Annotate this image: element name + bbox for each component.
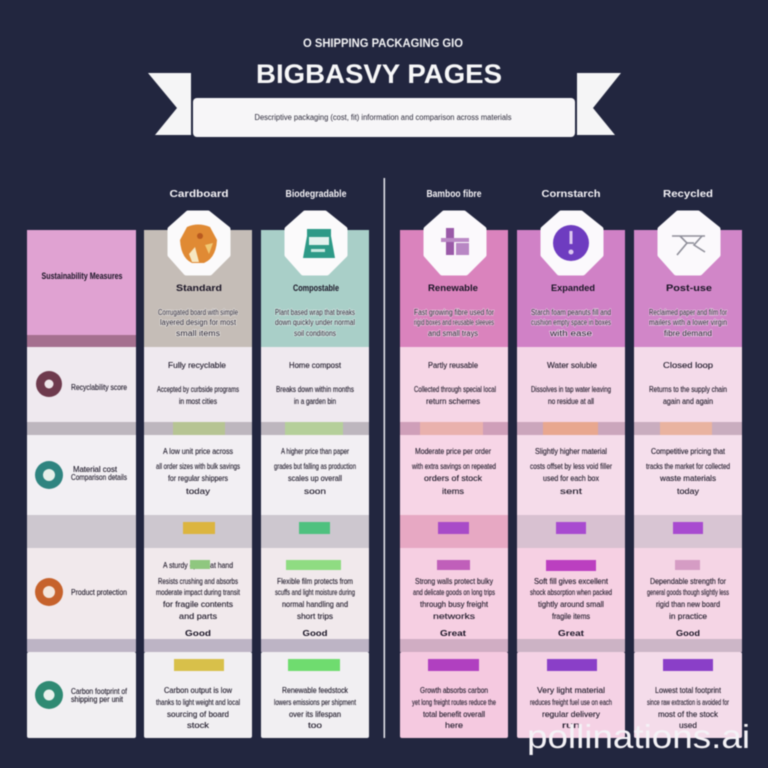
column 4 row 1 — [531, 361, 611, 406]
chip purple — [556, 522, 586, 534]
column 2 row 3 footer: Good — [302, 629, 328, 638]
chip light green — [285, 422, 343, 435]
column 5 row 2: tracks the market for collected — [646, 462, 730, 471]
column 2 row 3: Flexible film protects from — [277, 577, 353, 586]
column 4 row 1: no residue at all — [548, 397, 594, 406]
column 2 row 4: over its lifespan — [289, 710, 341, 719]
chip green wide — [288, 659, 340, 671]
column 4 body — [517, 347, 625, 738]
column 5 row 3: in practice — [669, 612, 708, 621]
chip light green wide — [286, 560, 341, 570]
column 5 name: Recycled — [663, 188, 713, 200]
column 4 row 3: shock absorption when packed — [530, 588, 612, 597]
column 1 row 4: stock — [187, 721, 210, 730]
ribbon caption: Descriptive packaging (cost, fit) information and comparison across materials — [254, 113, 512, 122]
column 4 row 2 — [530, 447, 612, 496]
column 1 row 2: for regular shippers — [168, 474, 228, 483]
column 1 description: small items — [176, 329, 220, 338]
row 1 label: Recyclability score — [71, 383, 127, 392]
column 2 description: soil conditions — [294, 329, 336, 338]
column 3 badge — [426, 213, 484, 273]
column 4 badge — [543, 213, 601, 273]
column 3 row 3 — [413, 577, 495, 621]
column 1 row 1: in most cities — [179, 397, 217, 406]
column 3 row 3: and delicate goods on long trips — [413, 588, 495, 597]
column 4 header cell — [517, 230, 625, 347]
column 5 header cell — [634, 230, 742, 347]
column 2 row 4: too — [308, 721, 323, 730]
column 2 header cell — [261, 230, 369, 347]
row 2 label: Material cost — [73, 465, 118, 474]
column 5 row 3: rigid than new board — [656, 600, 720, 609]
column 1: orange — [144, 188, 252, 738]
column 4 row 3: tightly around small — [538, 600, 604, 609]
column 4 row 2: Slightly higher material — [535, 447, 607, 456]
column 2 row 3: scuffs and light moisture during — [275, 588, 355, 597]
column 5 row 3 footer: Good — [676, 629, 700, 638]
chip violet — [663, 659, 713, 671]
column 5 row 2: waste materials — [659, 474, 716, 483]
chip yellow wide — [174, 659, 224, 671]
column 2 row 4 — [274, 686, 357, 730]
column 5 row 3: Dependable strength for — [650, 577, 726, 586]
column 1 row 1: Fully recyclable — [168, 361, 227, 370]
column 3 description: rigid boxes and reusable sleeves — [414, 318, 494, 327]
column 3 description — [414, 308, 494, 338]
column 1 row 3: and parts — [179, 612, 217, 621]
column 5 row 3 — [647, 577, 729, 621]
column 5: lilac — [634, 188, 742, 738]
chip yellow — [183, 522, 215, 534]
column 2 row 2 — [274, 447, 356, 496]
column 4 row 3 — [530, 577, 612, 621]
chip salmon — [543, 422, 598, 435]
column 5 description — [649, 308, 727, 338]
center divider — [384, 178, 385, 738]
chip magenta wide — [428, 659, 479, 671]
column 3 row 3: networks — [433, 612, 475, 621]
column 1 description: layered design for most — [160, 318, 237, 327]
column 1 row 3: A sturdy option at hand — [163, 561, 233, 570]
column 1 row 2 — [156, 447, 240, 496]
icon: row 3 ring — [35, 578, 63, 606]
watermark: pollinations.ai — [527, 718, 750, 755]
column 1 row 3: for fragile contents — [163, 600, 233, 609]
column 1 row 3: moderate impact during transit — [156, 588, 241, 597]
column 5 description: mailers with a lower virgin — [649, 318, 727, 327]
column 3 description: and small trays — [428, 329, 478, 338]
icon: purple glyph — [441, 228, 469, 255]
column 4 description: Starch foam peanuts fill and — [531, 308, 611, 317]
column 2 row 1: Home compost — [289, 361, 342, 370]
column 1 row 4: sourcing of board — [167, 710, 229, 719]
column 5 row 4: since raw extraction is avoided for — [647, 698, 729, 707]
column 2 description: down quickly under normal — [275, 318, 355, 327]
column 4 row 2: used for each box — [543, 474, 599, 483]
column 4 row 3: fragile items — [552, 612, 590, 621]
column 5 row 3: general goods though slightly less — [647, 588, 729, 597]
label header text: Sustainability Measures — [42, 271, 122, 282]
column 2 row 1: in a garden bin — [294, 397, 336, 406]
column 3 name: Bamboo fibre — [426, 188, 482, 200]
chip peach — [420, 422, 483, 435]
column 3 row 2: items — [442, 487, 464, 496]
column 2 row 4: Renewable feedstock — [282, 686, 349, 695]
column 3 description: Fast growing fibre used for — [414, 308, 494, 317]
column 2: teal — [261, 188, 369, 738]
column 2 row 3: short trips — [297, 612, 333, 621]
icon: orange package — [180, 224, 217, 263]
column 2 row 2: A higher price than paper — [281, 447, 349, 456]
chip green small — [190, 560, 210, 569]
column 5 row 4 — [647, 686, 729, 730]
column 4 row 2: costs offset by less void filler — [530, 462, 612, 471]
column 4 row 4: reduces freight fuel use on each — [530, 698, 612, 707]
column 2 body — [261, 347, 369, 738]
column 1 row 1 — [157, 361, 239, 406]
icon: row 2 ring — [35, 461, 63, 489]
column 3 row 3 footer: Great — [440, 629, 466, 638]
column 3 row 1: Partly reusable — [428, 361, 479, 370]
column: row labels — [27, 230, 136, 738]
column 1 badge — [170, 213, 228, 273]
column 5 row 1: Returns to the supply chain — [649, 385, 727, 394]
column 5 row 1 — [649, 361, 727, 406]
icon: row 1 ring — [36, 371, 62, 397]
column 3 row 4: yet long freight routes reduce the — [412, 698, 496, 707]
column 4 row 4: regular delivery — [542, 710, 600, 719]
column 4 row 4: run — [562, 721, 580, 730]
column 5 badge — [660, 213, 718, 273]
column 2 row 1: Breaks down within months — [276, 385, 354, 394]
row 4 label: Carbon footprint of — [71, 687, 128, 696]
column 5 row 2: Competitive pricing that — [651, 447, 726, 456]
column 3 row 2 — [411, 447, 496, 496]
column 5 row 4: Lowest total footprint — [655, 686, 722, 695]
column 1 row 3 — [156, 561, 241, 621]
chip purple — [673, 522, 703, 534]
column 4 row 3: Soft fill gives excellent — [534, 577, 609, 586]
column 5 row 2: today — [677, 487, 699, 496]
column 2 row 4: lowers emissions per shipment — [274, 698, 357, 707]
column 5 heading: Post-use — [666, 283, 712, 294]
ribbon banner — [148, 73, 621, 137]
chip magenta — [546, 560, 596, 571]
subtitle: O SHIPPING PACKAGING GIO — [303, 36, 463, 50]
column 4 description — [531, 308, 611, 338]
column 4 row 3 footer: Great — [558, 629, 584, 638]
column 1 row 3: Resists crushing and absorbs — [158, 577, 238, 586]
column 2 row 1 — [276, 361, 354, 406]
column 4: violet — [517, 188, 625, 738]
column 1 row 4: Carbon output is low — [164, 686, 232, 695]
label header cell — [27, 230, 136, 335]
row 2 label: Comparison details — [71, 473, 127, 482]
column 5 description: Reclaimed paper and film for — [649, 308, 727, 317]
column 5 description: fibre demand — [664, 329, 712, 338]
column 1 row 4 — [156, 686, 240, 730]
column 2 description: Plant based wrap that breaks — [275, 308, 355, 317]
column 1 row 2: all order sizes with bulk savings — [156, 462, 240, 471]
column 4 row 4 — [530, 686, 612, 730]
icon: grey outline — [672, 236, 705, 255]
column 4 description: cushion empty space in boxes — [531, 318, 611, 327]
column 3 row 2: with extra savings on repeated — [411, 462, 496, 471]
column 5 row 1: again and again — [663, 397, 713, 406]
column 4 row 4: Very light material — [537, 686, 605, 695]
column 1 row 1: Accepted by curbside programs — [157, 385, 239, 394]
column 4 row 1: Dissolves in tap water leaving — [531, 385, 611, 394]
column 3 heading: Renewable — [428, 283, 478, 294]
chip purple — [438, 522, 469, 534]
column 3: magenta — [400, 188, 508, 738]
column 4 name: Cornstarch — [542, 188, 600, 200]
row 4 label — [71, 687, 128, 704]
column 4 description: with ease — [549, 329, 593, 338]
column 1 row 3 footer: Good — [185, 629, 211, 638]
column 2 row 2: scales up overall — [288, 474, 342, 483]
column 1 description — [158, 308, 238, 338]
column 5 row 4: used — [679, 721, 697, 730]
column 2 row 3: normal handling and — [282, 600, 348, 609]
chip pale rose — [675, 560, 700, 570]
column 1 row 2: A low unit price across — [163, 447, 233, 456]
column 3 row 4: Growth absorbs carbon — [420, 686, 488, 695]
column 2 row 2: grades but falling as production — [274, 462, 356, 471]
column 1 body — [144, 347, 252, 738]
column 2 description — [275, 308, 355, 338]
column 3 header cell — [400, 230, 508, 347]
row 2 label — [71, 465, 127, 482]
column 5 body — [634, 347, 742, 738]
column 1 header cell — [144, 230, 252, 347]
column 2 badge — [287, 213, 345, 273]
column 5 row 1: Closed loop — [663, 361, 714, 370]
ribbon center panel — [193, 98, 575, 137]
column 1 row 2: today — [186, 487, 210, 496]
column 3 body — [400, 347, 508, 738]
column 3 row 2: orders of stock — [424, 474, 483, 483]
column 2 row 2: soon — [304, 487, 326, 496]
column 3 row 1: return schemes — [426, 397, 480, 406]
column 2 heading: Compostable — [293, 283, 339, 294]
ribbon left tail — [148, 73, 191, 135]
chip orchid — [437, 560, 470, 570]
icon: purple circle — [553, 225, 589, 261]
column 3 row 4: here — [445, 721, 464, 730]
title: BIGBASVY PAGES — [256, 59, 502, 89]
column 5 row 4: most of the stock — [658, 710, 719, 719]
column 1 row 4: thanks to light weight and local — [156, 698, 240, 707]
chip violet — [547, 659, 597, 671]
row 3 label: Product protection — [71, 588, 127, 597]
column 1 description: Corrugated board with simple — [158, 308, 238, 317]
column 4 row 1: Water soluble — [547, 361, 598, 370]
row 4 label: shipping per unit — [71, 695, 124, 704]
icon: teal bag — [303, 229, 335, 258]
column 3 row 1 — [414, 361, 496, 406]
column 4 row 2: sent — [560, 487, 583, 496]
column 1 name: Cardboard — [170, 188, 228, 200]
column 3 row 3: Strong walls protect bulky — [415, 577, 493, 586]
chip emerald — [299, 522, 330, 534]
chip peach — [660, 422, 712, 435]
ribbon right tail — [577, 73, 621, 135]
column 5 row 2 — [646, 447, 730, 496]
column 2 row 3 — [275, 577, 355, 621]
column 3 row 4 — [412, 686, 496, 730]
column 2 name: Biodegradable — [286, 188, 347, 200]
column 4 heading: Expanded — [551, 283, 595, 294]
column 3 row 4: total benefit overall — [423, 710, 485, 719]
column 3 row 1: Collected through special local — [414, 385, 496, 394]
column 3 row 2: Moderate price per order — [415, 447, 491, 456]
icon: row 4 ring — [35, 681, 63, 709]
column 3 row 3: through busy freight — [420, 600, 489, 609]
column 1 heading: Standard — [176, 283, 222, 294]
chip green — [173, 422, 225, 435]
